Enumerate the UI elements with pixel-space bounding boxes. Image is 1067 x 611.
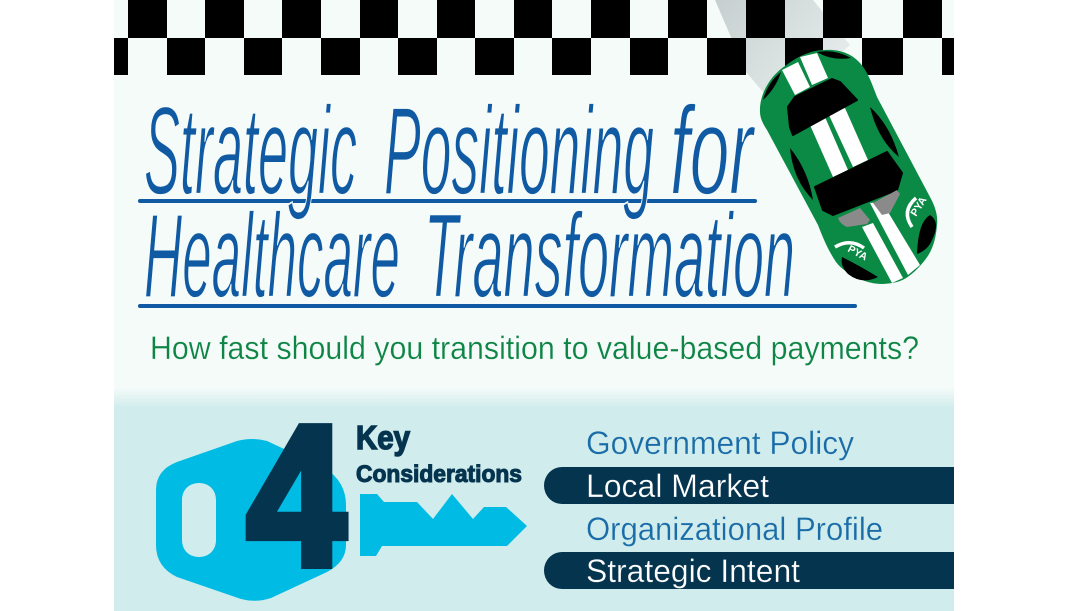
panel: header background bbox=[114, 0, 954, 390]
panel: key section background bbox=[114, 408, 954, 611]
subtitle: How fast should you transition to value-based payments? bbox=[150, 330, 919, 366]
racing stripes bbox=[782, 53, 920, 283]
side windows and lights bbox=[763, 51, 936, 280]
title underline 2 bbox=[138, 304, 857, 308]
car tire trail bbox=[715, 0, 850, 95]
title line 2: Healthcare bbox=[144, 189, 400, 323]
rear window bbox=[788, 79, 857, 135]
title line 1: Strategic bbox=[144, 82, 357, 221]
logos: PYA bbox=[908, 194, 930, 219]
car body bbox=[760, 50, 937, 284]
number 4: 4 bbox=[247, 384, 346, 607]
item: Organizational Profile: Organizational Profile bbox=[586, 511, 883, 547]
icon: key bbox=[156, 384, 527, 607]
title line 1: for bbox=[670, 82, 755, 221]
item bar: Strategic Intent bbox=[544, 552, 954, 589]
title underline 1 bbox=[138, 199, 757, 203]
heading: Key: Key bbox=[356, 419, 411, 456]
heading: Considerations: Considerations bbox=[356, 461, 522, 488]
item: Government Policy: Government Policy bbox=[586, 425, 854, 461]
item: Local Market: Local Market bbox=[586, 468, 769, 504]
list: four considerations bbox=[544, 425, 954, 589]
key blade bbox=[360, 494, 527, 556]
panel: fade between header and key section bbox=[114, 388, 954, 408]
headlight covers bbox=[838, 190, 900, 227]
icon: race car bbox=[760, 50, 937, 284]
logos: PYA bbox=[846, 243, 870, 264]
item: Strategic Intent: Strategic Intent bbox=[586, 553, 800, 589]
logos bbox=[835, 194, 930, 264]
item bar: Local Market bbox=[544, 467, 954, 504]
windshield bbox=[815, 152, 902, 215]
title line 1: Positioning bbox=[384, 82, 654, 221]
key bow bbox=[156, 439, 346, 601]
title bbox=[138, 82, 857, 323]
checkered flag band bbox=[114, 0, 954, 75]
